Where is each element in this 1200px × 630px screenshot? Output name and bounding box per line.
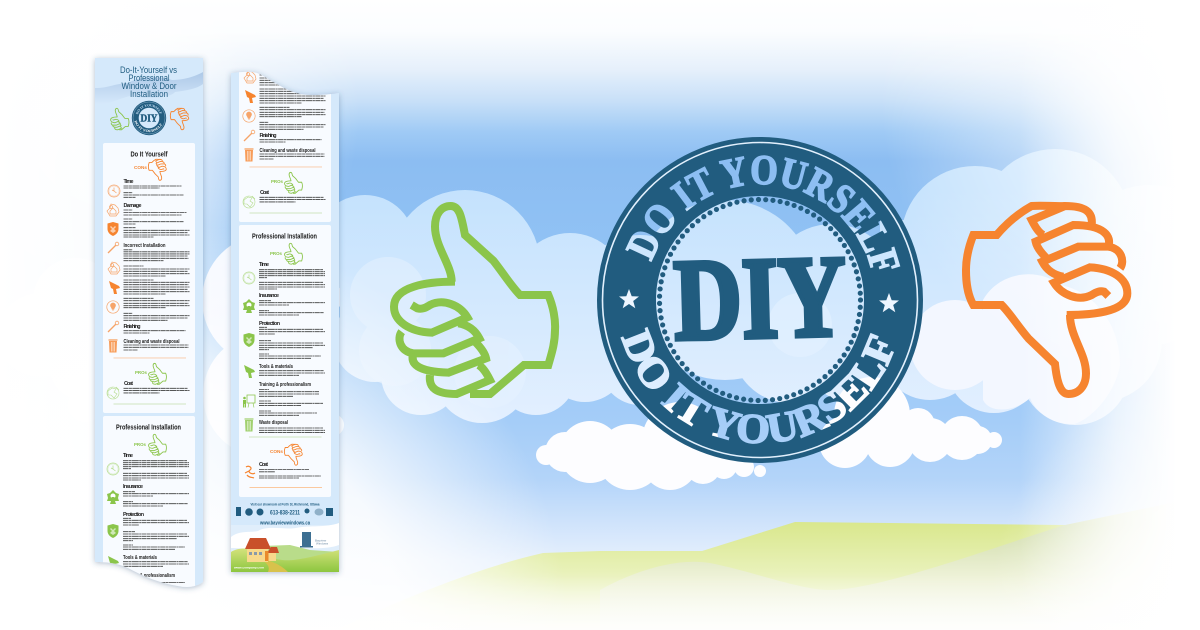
item: Finishing <box>108 321 186 333</box>
poster title: Installation <box>130 89 168 100</box>
footer scene <box>231 523 339 572</box>
cons label: CONs <box>134 165 147 171</box>
mini thumbs up <box>111 108 129 130</box>
divider <box>249 436 322 438</box>
item: Incorrect Installation continued <box>243 71 326 129</box>
heading: Do It Yourself <box>130 152 168 158</box>
item: Training & professionalism <box>140 573 185 583</box>
item: Finishing: Finishing <box>260 133 276 139</box>
poster: left strip <box>91 55 207 592</box>
pros label: PROs <box>271 179 283 185</box>
clouds: bright white low clouds <box>536 377 1002 490</box>
item: Cleaning and waste disposal: Cleaning and waste disposal <box>124 339 180 345</box>
poster title: Do-It-Yourself vs <box>120 65 177 76</box>
icon: orange thumbs down <box>966 206 1127 394</box>
item: Time <box>107 453 189 480</box>
logo: Bayview <box>315 538 327 542</box>
footer contact <box>250 502 320 526</box>
item: Tools & materials: Tools & materials <box>259 364 293 370</box>
panel: Do It Yourself <box>103 143 195 413</box>
item: Cleaning and waste disposal <box>244 148 324 162</box>
pros label: PROs <box>135 370 147 376</box>
certification badges <box>236 507 333 516</box>
item: Time: Time <box>124 179 134 185</box>
icon: green thumbs up <box>394 206 555 394</box>
panel: Do It Yourself continued <box>239 72 331 222</box>
item: Protection <box>108 512 189 549</box>
item: Insurance <box>107 484 189 506</box>
item: Cost <box>245 462 321 478</box>
divider <box>114 404 186 405</box>
pros label: PROs <box>134 442 146 448</box>
item: Time: Time <box>123 453 133 459</box>
showroom line: Visit our showroom at Perth St, Richmond, Ottawa <box>250 502 320 506</box>
pros thumb <box>285 243 302 264</box>
house <box>245 538 279 562</box>
divider <box>114 357 186 359</box>
logo: Windows <box>316 542 329 546</box>
poster: right strip <box>231 9 339 572</box>
item: Protection <box>244 321 325 358</box>
item: Time: Time <box>259 262 269 268</box>
DIY stamp <box>602 142 918 458</box>
heading: Professional Installation <box>116 424 181 432</box>
mini thumbs down <box>170 108 189 130</box>
item: Cost: Cost <box>124 381 133 387</box>
stamp ring with cut-out lettering <box>626 166 894 434</box>
panel: Professional Installation <box>239 225 331 497</box>
pros label: PROs <box>270 251 282 257</box>
pros thumb <box>149 363 166 384</box>
DIY letters: DIY <box>672 233 848 365</box>
item: Cost <box>243 190 326 208</box>
stars <box>619 289 899 312</box>
divider <box>250 487 322 488</box>
logo <box>300 532 329 548</box>
item: Cost <box>107 381 190 399</box>
item: Cleaning and waste disposal: Cleaning and waste disposal <box>260 148 316 154</box>
panel: Professional Installation <box>103 416 195 606</box>
item: Tools & materials <box>244 364 325 378</box>
poster title: Professional <box>128 73 170 84</box>
heading: Professional Installation <box>252 234 317 240</box>
mini DIY stamp: DO IT YOURSELF <box>134 120 162 132</box>
mini DIY stamp: DIY <box>140 114 158 124</box>
cons thumb <box>148 159 166 180</box>
item: Waste disposal: Waste disposal <box>259 420 288 426</box>
item: Finishing <box>244 130 322 142</box>
item: Training & professionalism: Training & professionalism <box>123 573 175 579</box>
item: Tools & materials: Tools & materials <box>123 555 157 561</box>
divider <box>250 166 322 168</box>
item: Training & professionalism: Training & professionalism <box>259 382 311 388</box>
item: Time <box>243 262 325 289</box>
website: www.bayviewwindows.ca <box>259 520 311 526</box>
hills <box>337 522 1200 630</box>
poster title: Window & Door <box>122 81 177 92</box>
poster header cloud <box>95 72 203 98</box>
item: Waste disposal <box>244 418 325 433</box>
dotted circle <box>660 200 860 400</box>
item: Cleaning and waste disposal <box>108 339 188 352</box>
pros thumb <box>285 172 302 193</box>
item: Insurance: Insurance <box>123 484 143 490</box>
item: Insurance: Insurance <box>259 293 279 299</box>
clouds: far white clouds behind posters <box>0 228 402 457</box>
item: Incorrect Installation: Incorrect Installation <box>124 243 166 249</box>
item: Cost: Cost <box>259 462 268 468</box>
item: Protection: Protection <box>259 321 280 327</box>
footer note: www.company.com <box>233 566 264 570</box>
item: Protection: Protection <box>123 512 144 518</box>
item: Tools & materials <box>108 555 189 567</box>
item: Finishing: Finishing <box>124 324 140 330</box>
phone: 613-838-2211 <box>270 510 300 516</box>
item: Cost: Cost <box>260 190 269 196</box>
cons thumb <box>284 444 302 465</box>
item: Incorrect Installation <box>107 242 190 320</box>
item: Training & professionalism <box>243 382 323 415</box>
poster title <box>120 66 177 97</box>
item: Insurance <box>243 293 325 315</box>
clouds: paler lobes <box>350 257 832 408</box>
pros thumb <box>149 434 166 455</box>
pale inner line <box>602 142 918 458</box>
item: Time <box>108 179 184 197</box>
item: Damage <box>107 203 190 237</box>
mini DIY stamp: DO IT YOURSELF <box>136 104 162 114</box>
clouds: large pale band <box>315 149 1200 425</box>
divider <box>250 212 322 214</box>
item: Damage: Damage <box>124 203 142 209</box>
cons label: CONs <box>270 449 283 455</box>
mini DIY stamp <box>132 100 166 136</box>
